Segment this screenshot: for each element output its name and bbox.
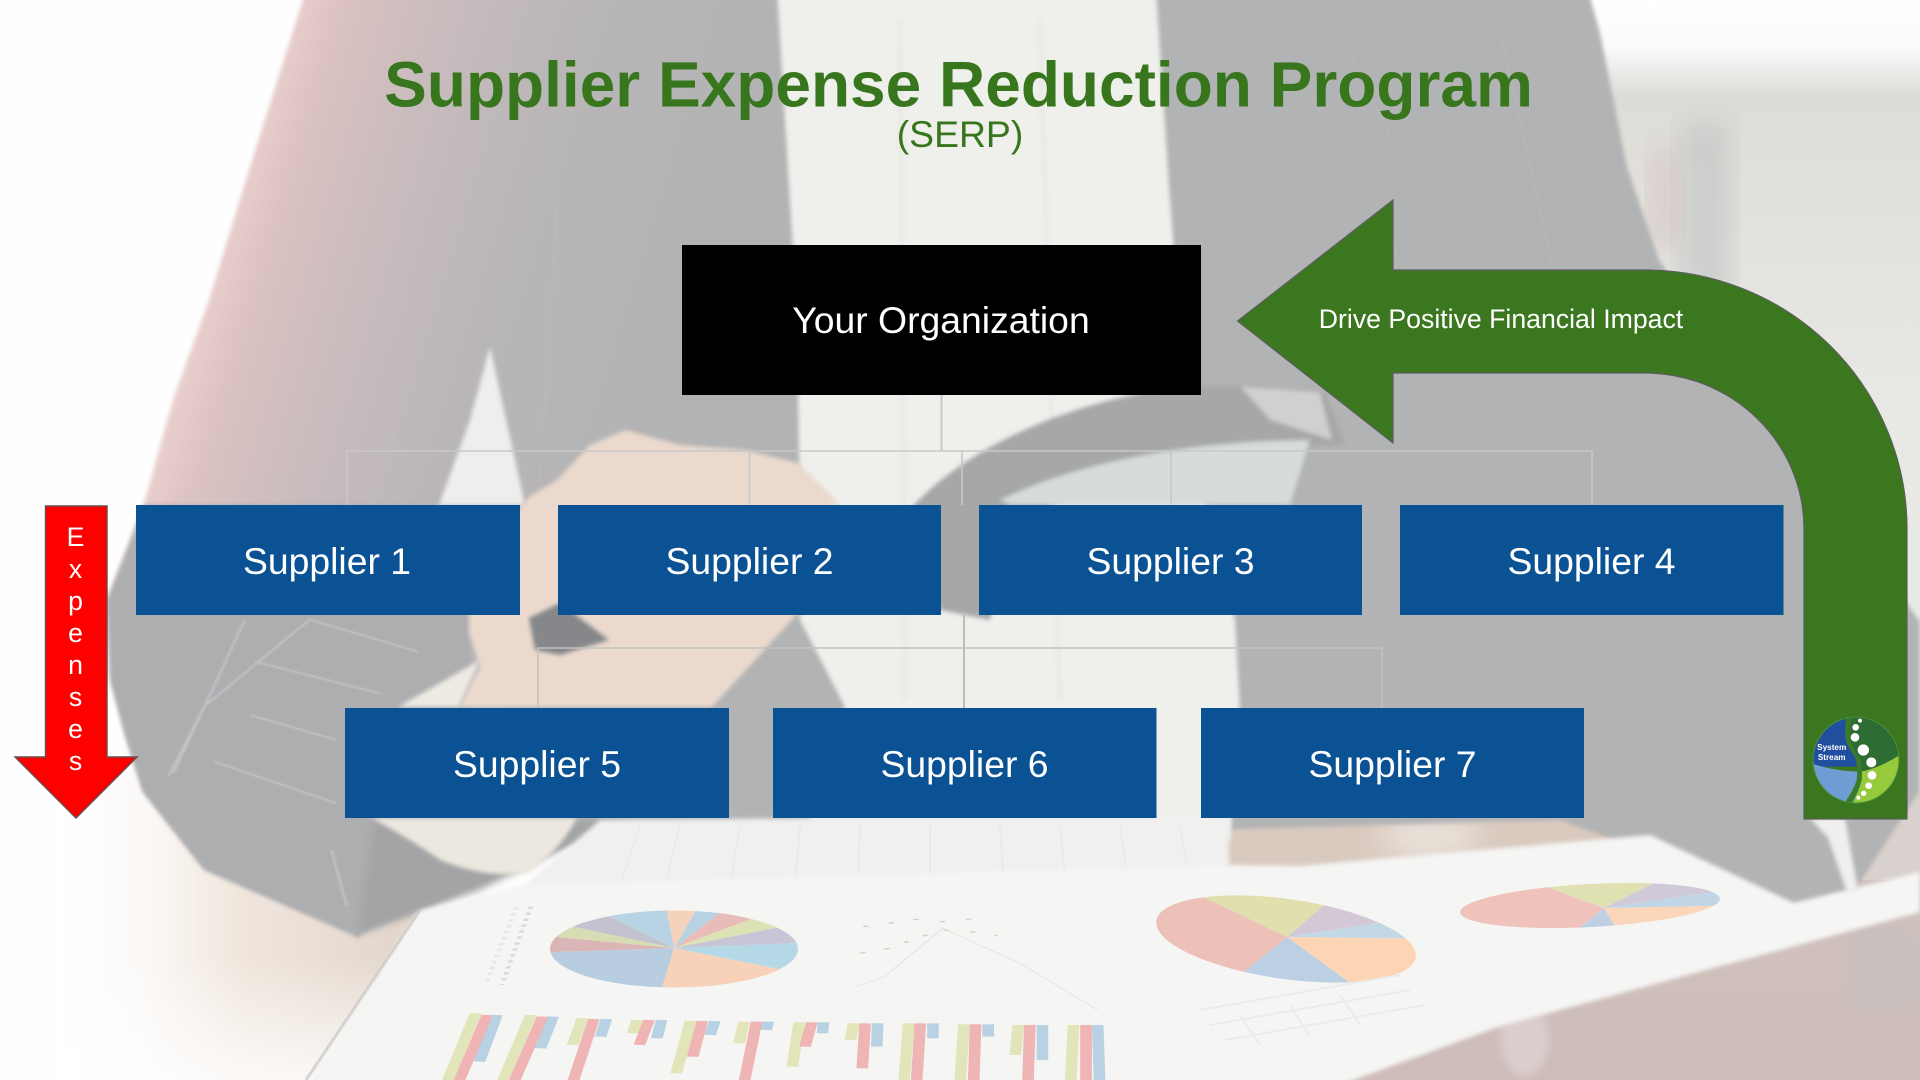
pinstripes	[390, 10, 1560, 480]
arrow: expenses: n	[68, 650, 83, 680]
title: Supplier Expense Reduction Program	[384, 48, 1533, 120]
shirt cuff by wrist	[398, 660, 480, 707]
arrow: expenses: e	[68, 618, 83, 648]
ring on finger	[529, 603, 609, 655]
box: supplier 5: Supplier 5	[453, 743, 621, 785]
bottom left table	[60, 770, 420, 1080]
arrow: expenses: x	[69, 554, 83, 584]
box: supplier 5	[345, 708, 729, 818]
pie chart 3	[1460, 883, 1720, 928]
main paper sheet	[306, 835, 1920, 1080]
box: supplier 1	[136, 505, 520, 615]
right backdrop	[1560, 0, 1920, 800]
white sliver at right sleeve	[1810, 818, 1858, 895]
box: supplier 4: Supplier 4	[1507, 540, 1676, 582]
box: supplier 6	[773, 708, 1156, 818]
box: your organization: Your Organization	[792, 299, 1090, 341]
pie chart 2	[1156, 895, 1416, 983]
connector lines	[347, 395, 1592, 708]
bar chart on paper	[447, 1013, 1100, 1080]
magnifying glass	[905, 385, 1345, 620]
box: supplier 3	[979, 505, 1362, 615]
pie chart 1	[550, 910, 798, 988]
bottom right table	[1200, 809, 1920, 1080]
diagram overlay	[13, 60, 1908, 820]
table grid on paper	[1200, 975, 1425, 1045]
upper paper sheet	[520, 815, 1229, 890]
arrow: expenses: E	[67, 522, 84, 552]
box: supplier 4	[1400, 505, 1784, 615]
subtitle: (SERP)	[897, 113, 1023, 155]
hand	[459, 430, 850, 707]
icon: system stream logo: System	[1817, 743, 1846, 752]
box: supplier 2	[558, 505, 941, 615]
arrow: expenses: e	[68, 714, 83, 744]
box: supplier 2: Supplier 2	[665, 540, 834, 582]
icon: system stream logo: Stream	[1818, 753, 1846, 762]
white shirt gap under lapel	[439, 347, 525, 505]
box: supplier 3: Supplier 3	[1086, 540, 1255, 582]
arrow: drive positive financial impact: Drive Positive Financial Impact	[1319, 304, 1684, 334]
arrow: expenses: p	[68, 586, 83, 616]
sleeve shading and stripes	[107, 505, 470, 938]
white shirt	[777, 0, 1240, 840]
arrow: expenses: s	[69, 682, 82, 712]
box: supplier 1: Supplier 1	[243, 540, 411, 582]
box: supplier 6: Supplier 6	[880, 743, 1049, 785]
arrow: expenses	[15, 506, 137, 818]
right hand	[1845, 790, 1920, 1015]
line chart on paper	[855, 919, 1098, 1010]
arrow: expenses: s	[69, 746, 82, 776]
legend marks on paper	[485, 907, 531, 985]
box: supplier 7	[1201, 708, 1584, 818]
arrow: drive positive financial impact	[1238, 200, 1907, 819]
lower shirt cuff and shadow	[357, 818, 620, 935]
icon: system stream logo	[1812, 716, 1900, 804]
box: your organization	[682, 245, 1201, 395]
box: supplier 7: Supplier 7	[1308, 743, 1477, 785]
